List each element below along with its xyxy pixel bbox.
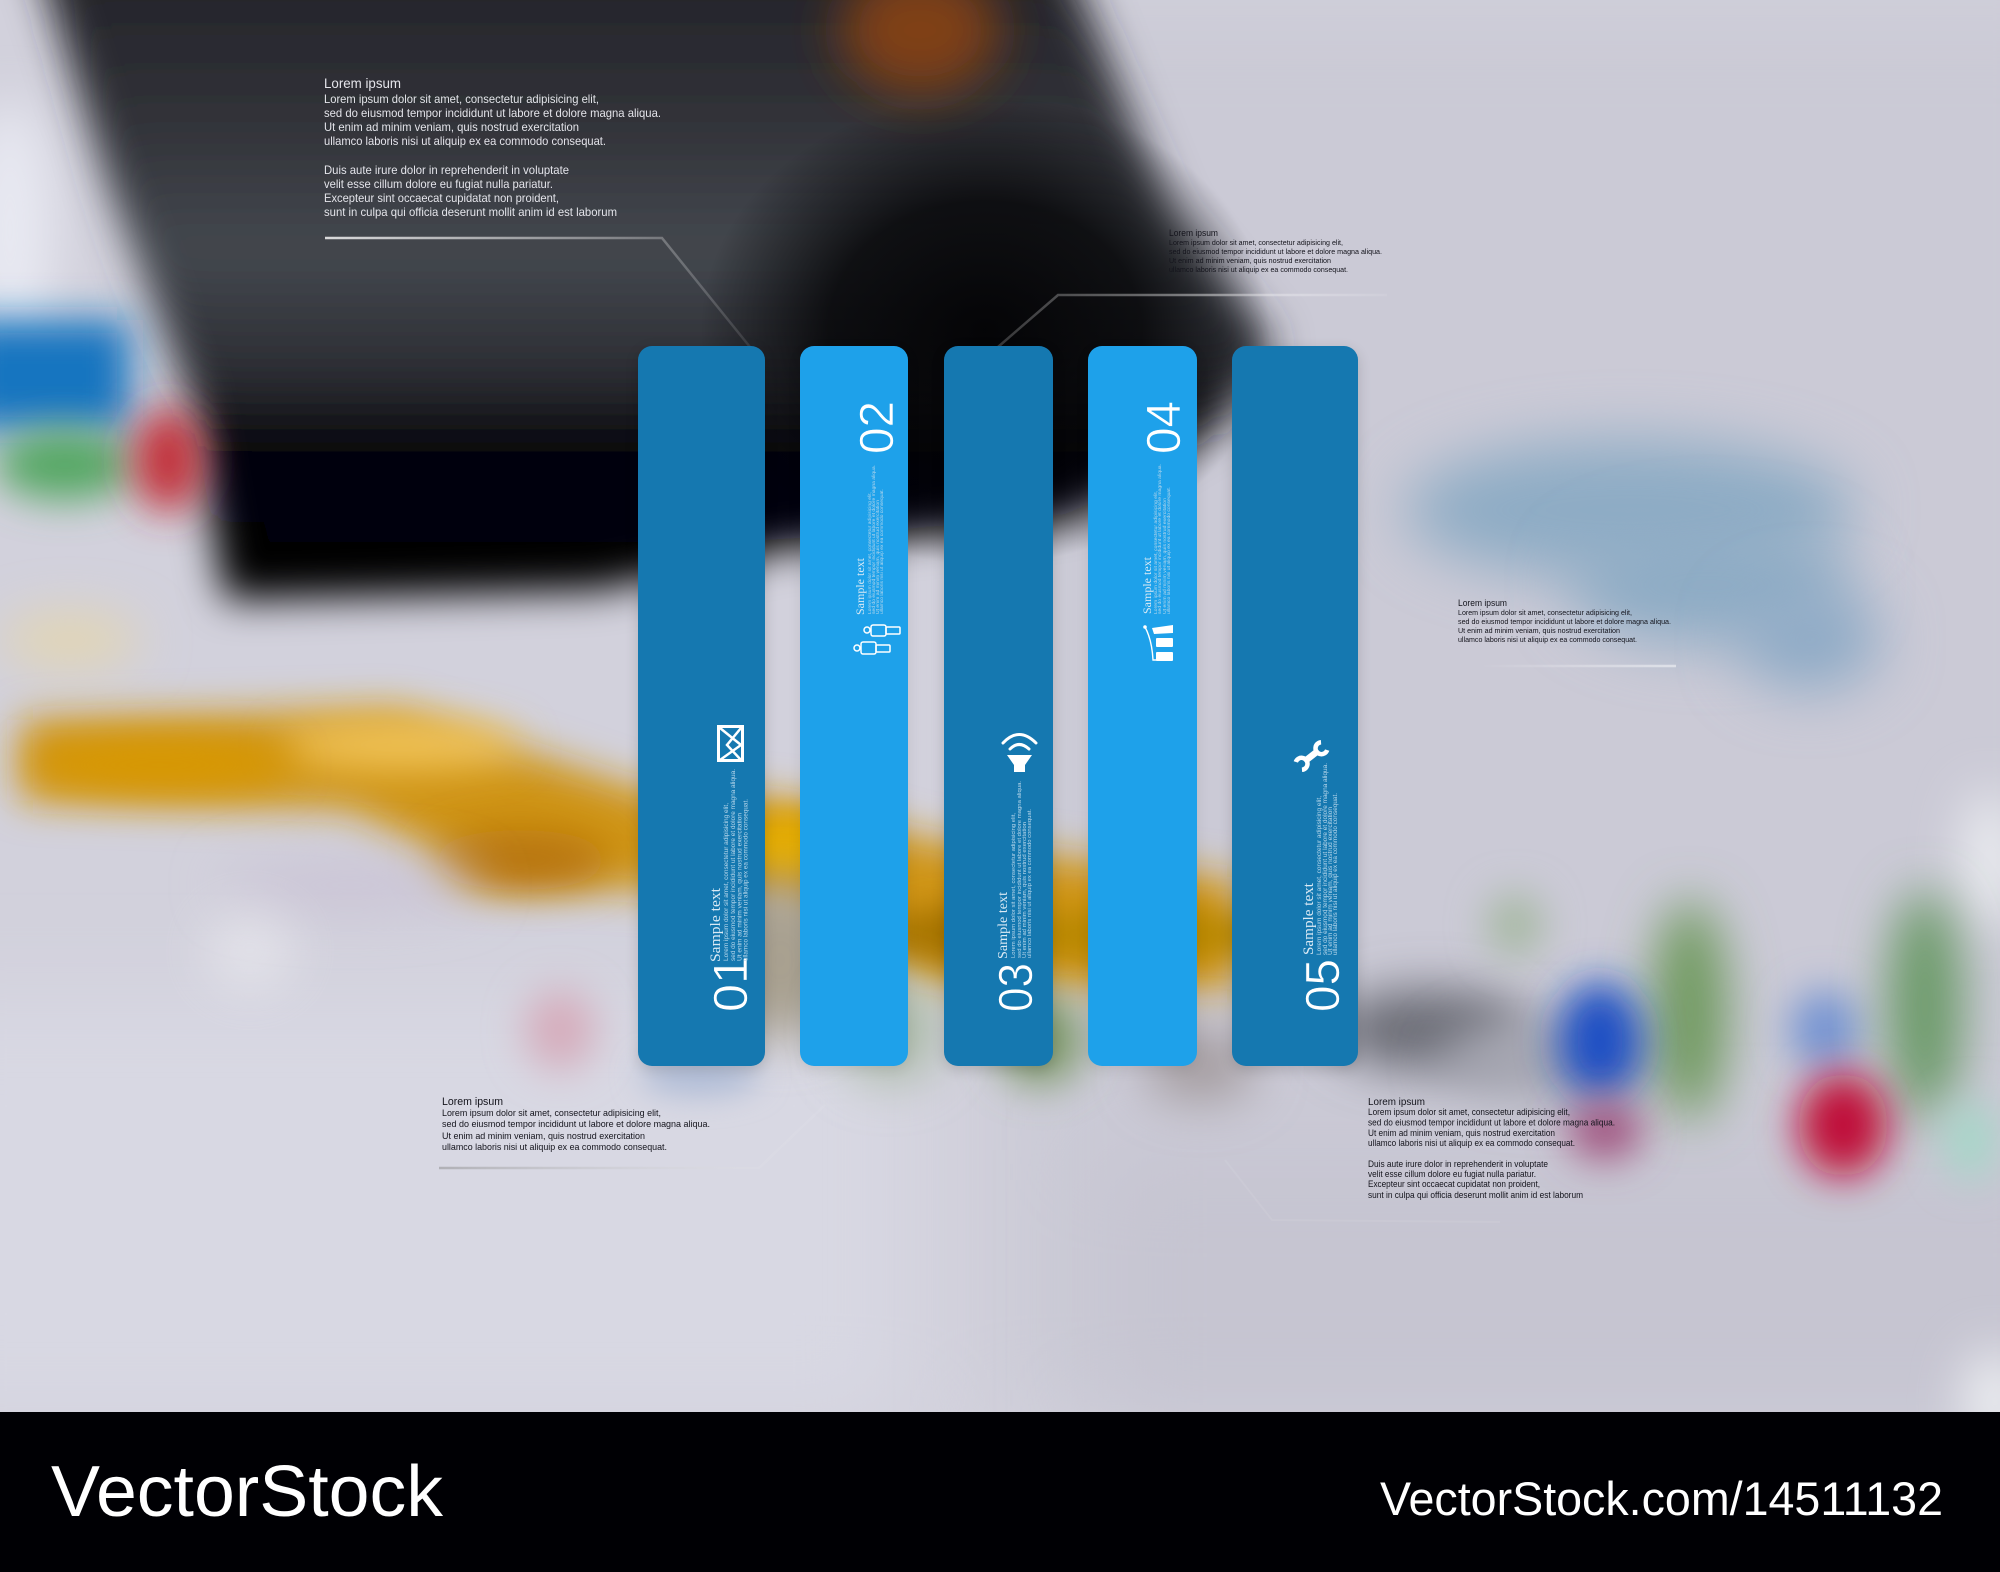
dark blob (30, 0, 1275, 600)
callout 3: right text: ullamco laboris nisi ut aliquip ex ea commodo consequat. (1458, 635, 1637, 644)
callout 5: bottom right text: ullamco laboris nisi ut aliquip ex ea commodo consequat. (1368, 1138, 1575, 1148)
callout 1: top left text: Lorem ipsum (324, 75, 401, 91)
panel: bar 02: 02 (851, 401, 904, 454)
callout 5: bottom right text: Lorem ipsum dolor sit amet, consectetur adipisicing elit, (1368, 1107, 1570, 1117)
panel: bar 05: 05 (1297, 959, 1350, 1012)
callout 2: top middle text: sed do eiusmod tempor incididunt ut labore et dolore magna aliqua. (1169, 247, 1382, 256)
callout 4: bottom left text: Lorem ipsum dolor sit amet, consectetur adipisicing elit, (442, 1108, 661, 1119)
panel: bar 02: sed do eiusmod tempor incididunt ut labore et dolore magna aliqua. (871, 465, 876, 614)
callout 2: top middle text: Lorem ipsum dolor sit amet, consectetur adipisicing elit, (1169, 238, 1343, 247)
panel: bar 02 (800, 346, 908, 1070)
callout 3: right text: Ut enim ad minim veniam, quis nostrud exercitation (1458, 626, 1620, 635)
panel: bar 02: Lorem ipsum dolor sit amet, consectetur adipisicing elit, (867, 492, 872, 614)
panel: bar 03: Sample text (996, 892, 1011, 959)
callout 4: bottom left text: ullamco laboris nisi ut aliquip ex ea commodo consequat. (442, 1142, 667, 1153)
panel: bar 01: 01 (705, 956, 758, 1012)
lower left smudges (220, 859, 480, 911)
panel: bar 02: Ut enim ad minim veniam, quis nostrud exercitation (875, 500, 880, 614)
left colours (0, 320, 130, 430)
callout 1: top left text: Ut enim ad minim veniam, quis nostrud exercitation (324, 120, 579, 134)
callout 5: bottom right text (1368, 1096, 1615, 1200)
panel: bar 05: Ut enim ad minim veniam, quis nostrud exercitation (1328, 807, 1334, 955)
footer bar (0, 1412, 2000, 1572)
callout 1: top left text (324, 75, 661, 219)
icon: envelope (718, 726, 742, 760)
callout 5: bottom right text: sed do eiusmod tempor incididunt ut labore et dolore magna aliqua. (1368, 1118, 1615, 1128)
callout 5: bottom right text: Duis aute irure dolor in reprehenderit in voluptate (1368, 1159, 1548, 1169)
callout 1 leader line (325, 238, 750, 347)
panel: bar 03 (944, 346, 1053, 1070)
callout 5: bottom right text: sunt in culpa qui officia deserunt mollit anim id est laborum (1368, 1190, 1583, 1200)
callout 2: top middle text: Ut enim ad minim veniam, quis nostrud exercitation (1169, 256, 1331, 265)
callout 1: top left text: Excepteur sint occaecat cupidatat non proident, (324, 191, 559, 205)
panel: bar 03: sed do eiusmod tempor incididunt ut labore et dolore magna aliqua. (1017, 781, 1023, 958)
callout 1: top left text: ullamco laboris nisi ut aliquip ex ea commodo consequat. (324, 134, 606, 148)
lower right colours (1330, 990, 1530, 1070)
callout 3: right text: Lorem ipsum (1458, 598, 1507, 608)
callout 5: bottom right text: Lorem ipsum (1368, 1096, 1425, 1108)
panel: bar 05: Sample text (1301, 882, 1317, 955)
icon: cart with bars (1143, 625, 1173, 661)
panel: bar 01: Lorem ipsum dolor sit amet, consectetur adipisicing elit, (724, 803, 730, 961)
footer url: VectorStock.com/14511132 (1380, 1473, 1943, 1526)
callout 4: bottom left text: Lorem ipsum (442, 1096, 503, 1108)
panel: bar 05 (1232, 346, 1358, 1070)
callout 1: top left text: Lorem ipsum dolor sit amet, consectetur adipisicing elit, (324, 92, 599, 106)
panel: bar 05: Lorem ipsum dolor sit amet, consectetur adipisicing elit, (1317, 796, 1323, 955)
panel: bar 03: Ut enim ad minim veniam, quis nostrud exercitation (1022, 822, 1028, 958)
panel: bar 04: sed do eiusmod tempor incididunt ut labore et dolore magna aliqua. (1157, 464, 1162, 614)
icon: plugs (854, 625, 900, 654)
callout 1: top left text: sed do eiusmod tempor incididunt ut labore et dolore magna aliqua. (324, 106, 661, 120)
panel: bar 04: 04 (1138, 401, 1191, 454)
panel: bar 03: 03 (990, 963, 1043, 1012)
yellow band (20, 710, 1240, 990)
callout 2 leader line (998, 295, 1387, 347)
panel: bar 04: Ut enim ad minim veniam, quis nostrud exercitation (1162, 498, 1167, 614)
icon: wrench (1295, 741, 1328, 771)
callout 2: top middle text (1169, 228, 1382, 274)
callout 3: right text: sed do eiusmod tempor incididunt ut labore et dolore magna aliqua. (1458, 617, 1671, 626)
callout 5 leader line (1225, 1160, 1500, 1222)
panel: bar 01: ullamco laboris nisi ut aliquip ex ea commodo consequat. (744, 799, 750, 961)
callout 1: top left text: sunt in culpa qui officia deserunt mollit anim id est laborum (324, 205, 617, 219)
panel: bar 02: Sample text (855, 557, 867, 615)
callout 2: top middle text: Lorem ipsum (1169, 228, 1218, 238)
panel: bar 04: ullamco laboris nisi ut aliquip ex ea commodo consequat. (1166, 487, 1171, 614)
panel: bar 01 (638, 346, 765, 1070)
callout 5: bottom right text: velit esse cillum dolore eu fugiat nulla pariatur. (1368, 1169, 1536, 1179)
footer logo: VectorStock (51, 1452, 444, 1532)
callout 3: right text: Lorem ipsum dolor sit amet, consectetur adipisicing elit, (1458, 608, 1632, 617)
panel: bar 04: Lorem ipsum dolor sit amet, consectetur adipisicing elit, (1153, 491, 1158, 614)
panel: bar 01: Ut enim ad minim veniam, quis nostrud exercitation (738, 813, 744, 961)
panel: bar 04: Sample text (1142, 556, 1154, 614)
panel: bar 01: Sample text (708, 887, 724, 962)
callout 5: bottom right text: Excepteur sint occaecat cupidatat non proident, (1368, 1179, 1540, 1189)
callout 4: bottom left text (442, 1096, 710, 1153)
callout 2: top middle text: ullamco laboris nisi ut aliquip ex ea commodo consequat. (1169, 265, 1348, 274)
panel: bar 03: ullamco laboris nisi ut aliquip ex ea commodo consequat. (1027, 809, 1033, 958)
panel: bar 03: Lorem ipsum dolor sit amet, consectetur adipisicing elit, (1011, 813, 1017, 958)
callout 1: top left text: Duis aute irure dolor in reprehenderit in voluptate (324, 163, 569, 177)
right blue-grey (1405, 440, 1855, 580)
callout 4: bottom left text: sed do eiusmod tempor incididunt ut labore et dolore magna aliqua. (442, 1119, 710, 1130)
panel: bar 01: sed do eiusmod tempor incididunt ut labore et dolore magna aliqua. (731, 769, 737, 961)
callout 3 leader line (1480, 665, 1676, 667)
icon: wireless funnel (1003, 734, 1036, 772)
panel: bar 05: sed do eiusmod tempor incididunt ut labore et dolore magna aliqua. (1323, 763, 1329, 955)
panel: bar 04 (1088, 346, 1197, 1070)
callout 4: bottom left text: Ut enim ad minim veniam, quis nostrud exercitation (442, 1131, 645, 1142)
callout 4 leader line (439, 1105, 825, 1168)
callout 5: bottom right text: Ut enim ad minim veniam, quis nostrud exercitation (1368, 1128, 1555, 1138)
panel: bar 02: ullamco laboris nisi ut aliquip ex ea commodo consequat. (879, 489, 884, 614)
panel: bar 05: ullamco laboris nisi ut aliquip ex ea commodo consequat. (1333, 793, 1339, 955)
callout 1: top left text: velit esse cillum dolore eu fugiat nulla pariatur. (324, 177, 553, 191)
callout 3: right text (1458, 598, 1671, 644)
